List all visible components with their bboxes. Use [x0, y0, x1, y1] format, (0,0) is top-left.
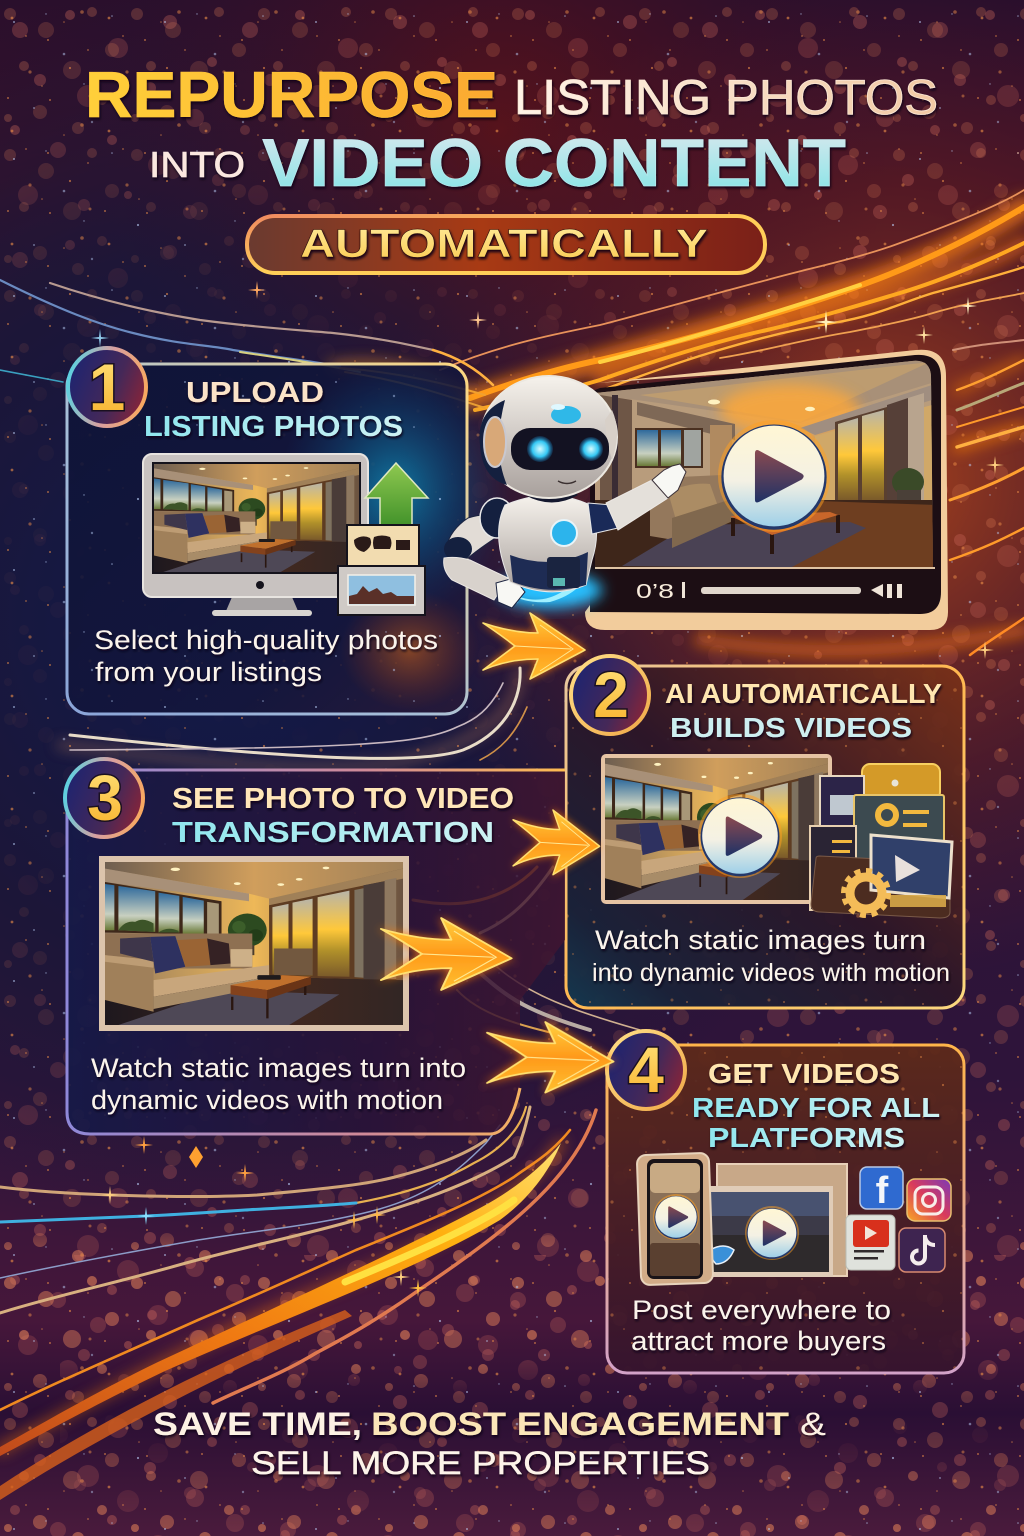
- room photo: [99, 856, 409, 1031]
- heading: READY FOR ALL: [692, 1092, 940, 1123]
- heading: [172, 783, 514, 849]
- icon: green upload arrow: [365, 463, 428, 530]
- description: [592, 925, 950, 987]
- icon: photo stack: [338, 525, 425, 615]
- title words: LISTING PHOTOS: LISTING PHOTOS: [514, 71, 938, 125]
- description: attract more buyers: [631, 1326, 886, 1356]
- description: into dynamic videos with motion: [592, 959, 950, 987]
- panel 2: AI automatically builds videos: [566, 656, 964, 1008]
- step number 1: [68, 348, 146, 426]
- badge: automatically: [247, 216, 765, 273]
- sparkles: [91, 281, 1004, 1297]
- video preview image: [601, 754, 832, 904]
- description: dynamic videos with motion: [91, 1085, 443, 1115]
- arrow: to step 4: [487, 1022, 613, 1093]
- heading: UPLOAD: [186, 377, 324, 409]
- robot torso: [499, 496, 597, 592]
- heading: AI AUTOMATICALLY: [665, 678, 942, 709]
- top right: [470, 207, 1024, 398]
- middle: [70, 668, 520, 758]
- heading: GET VIDEOS: [708, 1058, 900, 1089]
- icon: video on desktop card: [707, 1164, 847, 1277]
- step number 4: [607, 1031, 685, 1109]
- title word: INTO: INTO: [149, 144, 245, 185]
- description: [91, 1053, 466, 1115]
- icon: facebook: f: [876, 1170, 889, 1212]
- step number 4: 4: [628, 1034, 664, 1106]
- robot head: [480, 376, 617, 498]
- description: Post everywhere to: [632, 1295, 891, 1325]
- icon: facebook: [860, 1167, 903, 1212]
- heading: [144, 377, 403, 443]
- arrow: photo to video: [381, 918, 512, 990]
- heading: LISTING PHOTOS: [144, 411, 403, 443]
- player controls: [636, 581, 902, 603]
- footer tagline: SAVE TIME,: [153, 1406, 362, 1442]
- step number 1: 1: [89, 350, 125, 424]
- heading: TRANSFORMATION: [172, 817, 494, 849]
- play button: [718, 420, 830, 532]
- step number 2: [571, 656, 649, 734]
- footer tagline: [153, 1406, 826, 1481]
- description: Watch static images turn: [595, 925, 926, 955]
- heading: SEE PHOTO TO VIDEO: [172, 783, 514, 815]
- arrow: step 1 to video: [483, 613, 585, 679]
- footer tagline: SELL MORE PROPERTIES: [251, 1445, 710, 1481]
- icon: tiktok: [899, 1228, 945, 1272]
- title: [85, 58, 938, 201]
- panel 1: upload listing photos: [67, 348, 510, 714]
- footer tagline: &: [800, 1406, 826, 1442]
- icon: youtube: [846, 1215, 895, 1270]
- panel 4: get videos ready for all platforms: [607, 1031, 964, 1373]
- top left: [0, 280, 340, 366]
- step number 2: 2: [593, 659, 629, 731]
- title word: REPURPOSE: REPURPOSE: [85, 58, 498, 131]
- robot arm: pointing: [588, 464, 686, 534]
- icon: automation cards: [810, 764, 952, 918]
- badge: automatically: AUTOMATICALLY: [300, 222, 708, 266]
- arrow: to step 2: [513, 810, 600, 875]
- bottom: [0, 1310, 352, 1500]
- title words: VIDEO CONTENT: VIDEO CONTENT: [262, 125, 846, 201]
- description: Select high-quality photos: [94, 625, 438, 655]
- robot: [444, 376, 686, 608]
- description: [94, 625, 438, 687]
- icon: monitor with room photo: [143, 454, 368, 616]
- step number 3: 3: [87, 762, 123, 834]
- player controls: 0’8: [636, 581, 674, 603]
- panel 3: see photo to video transformation: [65, 759, 565, 1134]
- description: Watch static images turn into: [91, 1053, 466, 1083]
- heading: [692, 1058, 940, 1153]
- icon: instagram: [907, 1179, 951, 1221]
- player room scene: [590, 355, 935, 570]
- heading: BUILDS VIDEOS: [670, 712, 912, 743]
- panel: video player: [585, 350, 948, 630]
- step number 3: [65, 759, 143, 837]
- footer tagline: BOOST ENGAGEMENT: [371, 1406, 790, 1442]
- description: from your listings: [95, 657, 322, 687]
- robot chest light: [551, 520, 577, 546]
- icon: phone: [637, 1153, 713, 1285]
- heading: PLATFORMS: [708, 1122, 905, 1153]
- description: [631, 1295, 891, 1356]
- heading: [665, 678, 942, 743]
- robot arm: left: [444, 498, 525, 608]
